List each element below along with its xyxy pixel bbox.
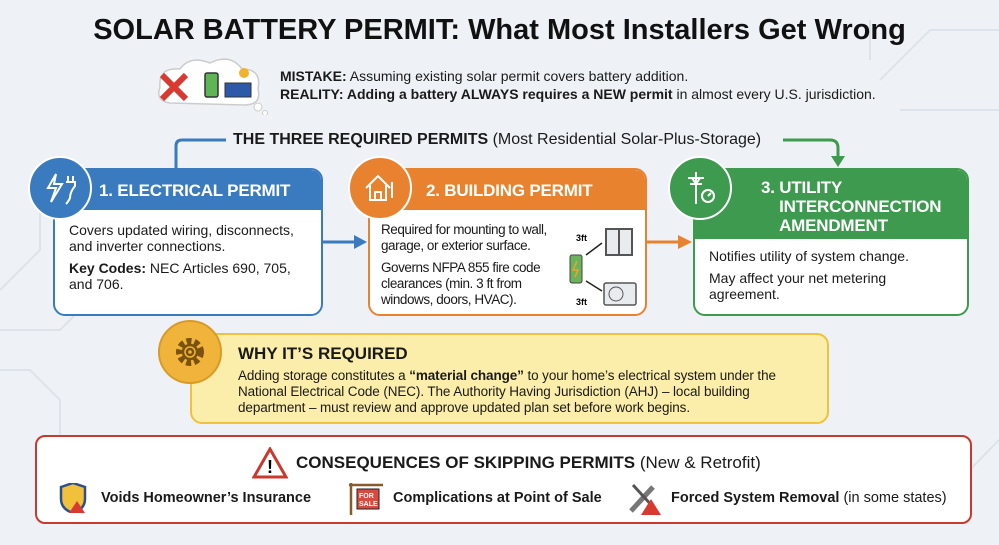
icon: house — [348, 156, 412, 220]
title: SOLAR BATTERY PERMIT: What Most Installers Get Wrong — [93, 14, 906, 46]
item: point of sale: SALE — [359, 501, 378, 508]
icon: utility pole and meter — [668, 156, 732, 220]
consequences heading: CONSEQUENCES OF SKIPPING PERMITS — [296, 453, 635, 472]
icon: lightning plug — [28, 156, 92, 220]
panel: utility interconnection — [693, 168, 969, 316]
icon: gear — [158, 320, 222, 384]
item: voids insurance: Voids Homeowner’s Insurance — [101, 490, 311, 506]
panel: utility interconnection: AMENDMENT — [779, 216, 888, 235]
item: forced removal: (in some states) — [843, 490, 947, 506]
panel: building permit: Governs NFPA 855 fire code clearances (min. 3 ft from windows, doors, HVAC). — [381, 260, 540, 307]
item: point of sale: Complications at Point of Sale — [393, 490, 602, 506]
panel: utility interconnection: INTERCONNECTION — [779, 197, 941, 216]
panel: utility interconnection: Notifies utility of system change. — [709, 248, 909, 264]
icon: clearance diagram — [570, 228, 637, 307]
mistake / reality text: REALITY: Adding a battery ALWAYS requires a NEW permit in almost every U.S. jurisdiction. — [280, 86, 876, 102]
item: point of sale — [349, 483, 602, 515]
panel: why it's required — [190, 333, 829, 424]
item: point of sale: FOR — [359, 493, 374, 500]
consequences heading — [252, 447, 761, 478]
panel: building permit: Required for mounting to wall, garage, or exterior surface. — [381, 222, 547, 253]
icon: clearance diagram: 3ft — [576, 233, 587, 243]
panel: utility interconnection: 3. UTILITY — [761, 178, 842, 197]
item: forced removal: Forced System Removal — [671, 490, 839, 506]
panel: why it's required: WHY IT’S REQUIRED — [238, 344, 408, 363]
panel: electrical permit: Covers updated wiring, disconnects, and inverter connections. — [69, 222, 294, 254]
item: forced removal — [629, 484, 947, 515]
panel: building permit: 2. BUILDING PERMIT — [426, 181, 592, 200]
panel: electrical permit — [53, 168, 323, 316]
consequences heading: (New & Retrofit) — [640, 453, 761, 472]
mistake / reality text: MISTAKE: Assuming existing solar permit covers battery addition. — [280, 68, 688, 84]
panel: electrical permit: 1. ELECTRICAL PERMIT — [99, 181, 290, 200]
heading: three required permits: THE THREE REQUIRED PERMITS (Most Residential Solar-Plus-Storage) — [233, 131, 761, 148]
panel: building permit — [368, 168, 647, 316]
panel: consequences — [35, 435, 972, 524]
panel: utility interconnection: May affect your net metering agreement. — [709, 270, 886, 302]
icon: clearance diagram: 3ft — [576, 297, 587, 307]
item: voids insurance — [60, 483, 311, 513]
mistake / reality text — [280, 68, 876, 102]
panel: electrical permit: Key Codes: NEC Articles 690, 705, and 706. — [69, 260, 291, 292]
icon: mistake thought cloud — [158, 58, 268, 115]
panel: why it's required: Adding storage constitutes a “material change” to your home’s electrical system under the National Electrical Code (NEC). The Authority Having Jurisdiction (AHJ) – local building department – must review and approve updated plan set before work begins. — [238, 368, 776, 415]
consequences heading: ! — [267, 457, 273, 477]
